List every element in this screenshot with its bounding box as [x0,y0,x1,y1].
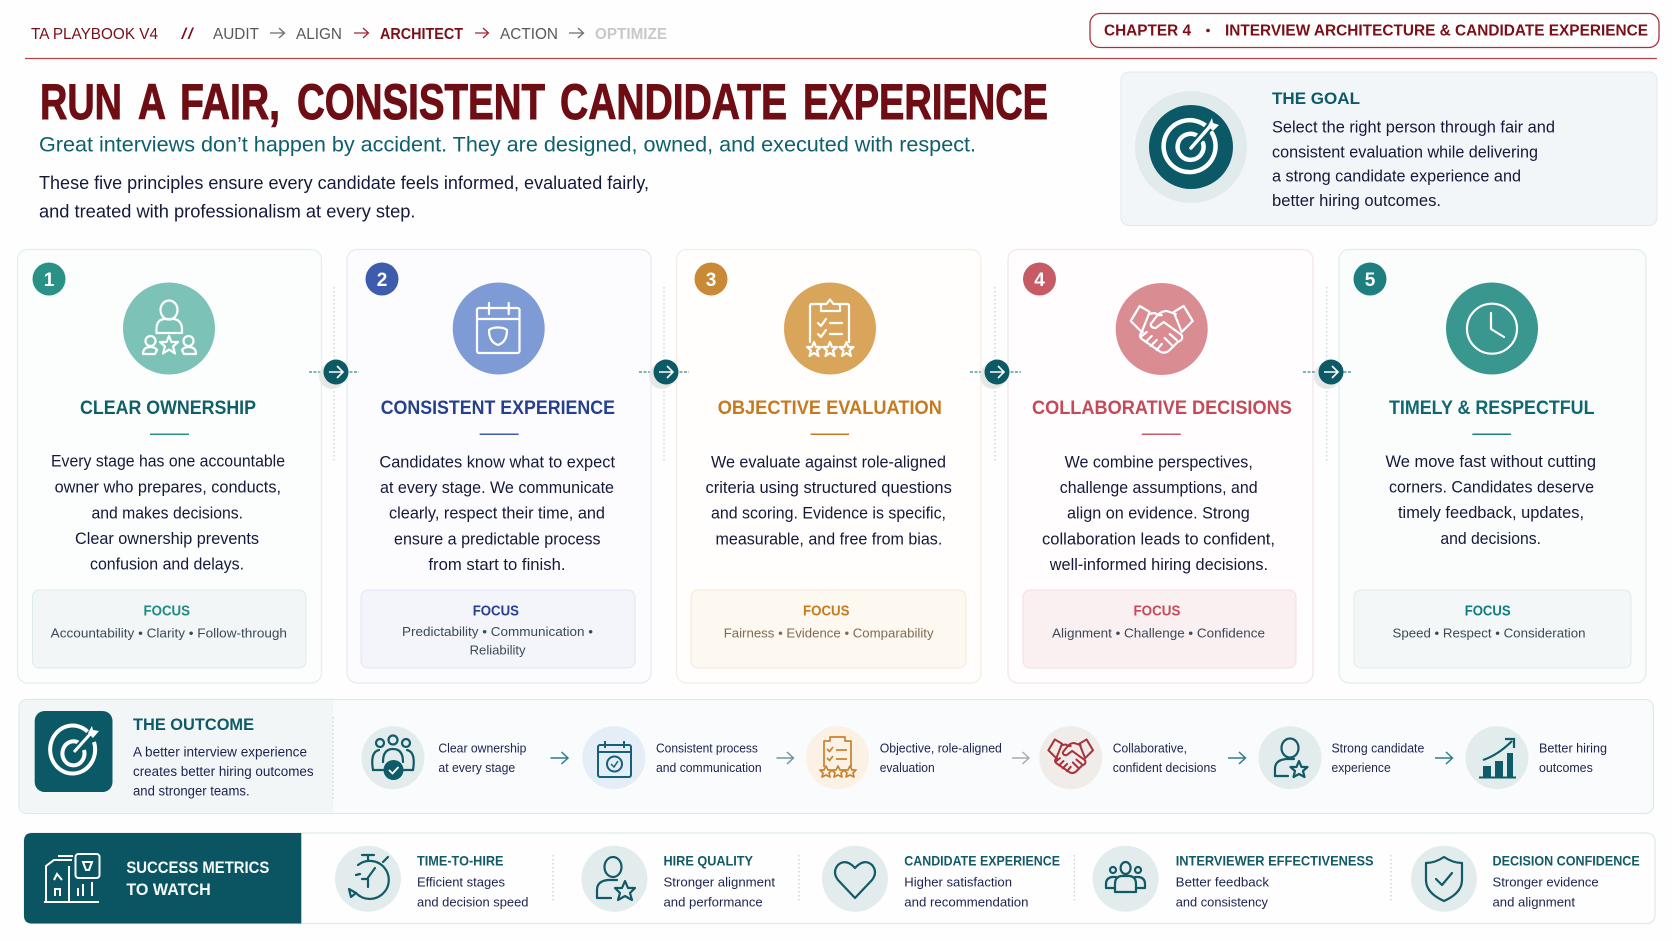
metric: time to hire: Efficient stages [417,875,505,890]
focus box: FOCUS [803,604,850,620]
outcome text: A better interview experience [133,745,307,760]
flow step 5 [1258,726,1424,789]
number badge 2 [366,262,398,296]
flow step 6: outcomes [1539,760,1593,775]
metric: decision confidence: and alignment [1492,895,1575,910]
connector arrow 2 [639,287,689,463]
focus box [32,590,306,668]
panel: card 5 timely and respectful [1339,250,1646,683]
metric: interviewer effectiveness [1093,846,1374,912]
card text: ensure a predictable process [394,530,601,548]
panel: the goal [1121,72,1657,226]
top navigation breadcrumb: // [181,26,195,43]
card text: confusion and delays. [90,556,244,574]
intro paragraph: These five principles ensure every candidate feels informed, evaluated fairly, [39,173,649,193]
flow step 5: experience [1332,760,1391,775]
card text: Candidates know what to expect [379,453,615,471]
top navigation breadcrumb: TA PLAYBOOK V4 [31,26,158,43]
flow step 4 [1039,726,1217,789]
flow step 1: at every stage [438,760,515,775]
focus box [691,590,966,668]
icon: clock [1446,282,1538,374]
panel: card 3 objective evaluation [676,250,981,683]
number badge 2: 2 [377,270,387,291]
card text: collaboration leads to confident, [1042,530,1275,548]
card text: We combine perspectives, [1065,453,1253,471]
panel: card 1 clear ownership [18,250,322,683]
icon: calendar [453,282,545,374]
connector arrow 1 [309,287,359,463]
metric: decision confidence [1411,846,1640,912]
focus box [361,590,635,668]
flow step 2 [582,726,762,789]
metric: interviewer effectiveness: Better feedback [1176,875,1270,890]
metric: hire quality: HIRE QUALITY [664,852,754,868]
top navigation breadcrumb: ACTION [500,26,558,43]
focus box: Accountability • Clarity • Follow-through [51,625,287,640]
panel: the outcome [19,700,1654,814]
card text: timely feedback, updates, [1398,504,1584,522]
arrow [550,752,568,764]
card text: align on evidence. Strong [1067,504,1250,522]
goal text: a strong candidate experience and [1272,168,1521,186]
flow step 1: Clear ownership [438,741,526,756]
metric: time to hire [335,846,528,912]
number badge 4: 4 [1034,270,1045,291]
metric: interviewer effectiveness: and consistency [1176,895,1268,910]
flow step 5: Strong candidate [1332,741,1424,756]
chapter pill [1090,14,1659,48]
number badge 5 [1354,262,1386,296]
card text: measurable, and free from bias. [716,530,942,548]
card text: from start to finish. [428,556,566,574]
goal heading: THE GOAL [1272,89,1360,108]
flow step 4: confident decisions [1113,760,1217,775]
title [40,74,1048,130]
intro paragraph [39,173,649,222]
card text: and decisions. [1440,530,1541,548]
top navigation breadcrumb: AUDIT [213,26,260,43]
card text: corners. Candidates deserve [1389,479,1594,497]
focus box: Speed • Respect • Consideration [1392,625,1586,640]
card text: Clear ownership prevents [75,530,259,548]
card text: owner who prepares, conducts, [55,478,281,496]
goal text [1272,119,1555,210]
card text: criteria using structured questions [706,479,952,497]
flow step 3 [806,726,1002,789]
title: A [138,74,166,130]
goal text: better hiring outcomes. [1272,192,1441,210]
card text: well-informed hiring decisions. [1049,556,1268,574]
metric: candidate experience [822,846,1060,912]
title: CONSISTENT [297,74,545,130]
flow step 6 [1466,726,1607,789]
card text [379,453,615,574]
card title: CLEAR OWNERSHIP [80,397,256,419]
card text: and makes decisions. [92,504,243,522]
focus box [1354,590,1631,668]
number badge 3 [694,262,728,296]
top navigation breadcrumb: ALIGN [296,26,342,43]
title: FAIR, [180,74,280,130]
card text: We move fast without cutting [1386,453,1596,471]
flow step 4: Collaborative, [1113,741,1187,756]
metric: candidate experience: CANDIDATE EXPERIENCE [904,852,1060,868]
metrics header: SUCCESS METRICS [126,858,269,877]
metric: interviewer effectiveness: INTERVIEWER EFFECTIVENESS [1176,852,1374,868]
card text: Every stage has one accountable [51,453,285,471]
metric: decision confidence: DECISION CONFIDENCE [1492,852,1640,868]
chapter pill: CHAPTER 4 [1104,23,1191,40]
flow step 2: and communication [656,760,762,775]
arrow [776,752,794,764]
card text: and scoring. Evidence is specific, [711,504,946,522]
outcome text: and stronger teams. [133,783,250,798]
metric: time to hire: TIME-TO-HIRE [417,852,504,868]
number badge 3: 3 [706,270,716,291]
arrow [1012,752,1029,764]
top navigation breadcrumb: OPTIMIZE [595,26,667,43]
title: CANDIDATE [560,74,787,130]
connector arrow 4 [1303,287,1352,463]
card title: COLLABORATIVE DECISIONS [1032,397,1292,419]
goal text: consistent evaluation while delivering [1272,143,1538,161]
panel: card 2 consistent experience [347,250,651,683]
subtitle: Great interviews don’t happen by accident. They are designed, owned, and executed with respect. [39,134,976,157]
arrow [1228,752,1246,764]
top navigation breadcrumb: ARCHITECT [380,26,463,43]
card text [51,453,285,574]
card title: TIMELY & RESPECTFUL [1389,397,1595,419]
metric: time to hire: and decision speed [417,895,528,910]
number badge 1 [32,262,66,296]
card text: challenge assumptions, and [1060,479,1258,497]
number badge 1: 1 [44,270,55,291]
focus box: Predictability • Communication • [402,624,593,639]
metric: hire quality: Stronger alignment [664,875,775,890]
card text: clearly, respect their time, and [389,504,605,522]
focus box: FOCUS [144,604,190,620]
focus box [1023,590,1296,668]
title: RUN [40,74,122,130]
metric: hire quality: and performance [664,895,763,910]
focus box: Alignment • Challenge • Confidence [1052,625,1265,640]
card title: CONSISTENT EXPERIENCE [381,397,615,419]
goal text: Select the right person through fair and [1272,119,1555,137]
icon: ownership people [123,282,215,374]
number badge 5: 5 [1365,270,1376,291]
intro paragraph: and treated with professionalism at every step. [39,202,416,222]
focus box: FOCUS [1134,604,1181,620]
card text: at every stage. We communicate [380,479,614,497]
number badge 4 [1023,262,1056,296]
flow step 6: Better hiring [1539,741,1607,756]
flow step 3: evaluation [880,760,935,775]
outcome text [133,716,314,798]
card title: OBJECTIVE EVALUATION [718,397,942,419]
icon: target [1135,91,1247,203]
metric: decision confidence: Stronger evidence [1492,875,1599,890]
flow step 1 [362,726,526,789]
metrics header: TO WATCH [126,880,211,899]
connector arrow 3 [970,287,1021,463]
metric: hire quality [581,846,775,912]
title: EXPERIENCE [803,74,1048,130]
outcome text: creates better hiring outcomes [133,764,314,779]
focus box: FOCUS [1465,604,1511,620]
card text [1042,453,1275,574]
metrics header [24,833,301,924]
icon: target tile [35,711,113,792]
panel: card 4 collaborative decisions [1008,250,1313,683]
card text [706,453,952,548]
focus box: FOCUS [473,604,519,620]
focus box: Fairness • Evidence • Comparability [724,626,934,641]
arrow [1435,752,1452,764]
top navigation breadcrumb [31,26,667,43]
flow step 2: Consistent process [656,741,758,756]
card text: We evaluate against role-aligned [711,453,946,471]
card text [1386,453,1596,548]
outcome text: THE OUTCOME [133,716,254,734]
icon: metrics building [44,854,100,902]
icon: handshake [1116,283,1208,375]
flow step 3: Objective, role-aligned [880,741,1002,756]
panel: success metrics [24,833,1655,924]
metric: candidate experience: Higher satisfaction [904,875,1012,890]
chapter pill: INTERVIEW ARCHITECTURE & CANDIDATE EXPERIENCE [1225,23,1648,40]
focus box: Reliability [470,642,526,658]
icon: clipboard with stars [784,282,876,374]
metric: candidate experience: and recommendation [904,895,1028,910]
